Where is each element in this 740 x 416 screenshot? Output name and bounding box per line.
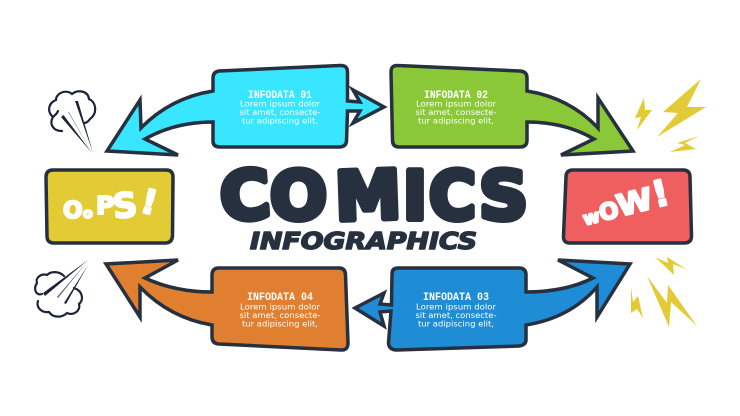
oops lettering: P: [96, 191, 114, 220]
body text: infodata 01: tur adipiscing elit,: [242, 116, 318, 126]
body text: infodata 01: [240, 100, 321, 126]
title: comics: [217, 155, 528, 237]
title: comics: M: [334, 156, 402, 236]
icon: smoke cloud bottom: [35, 260, 88, 317]
body text: infodata 01: sit amet, consecte-: [240, 108, 321, 117]
body text: infodata 04: tur adipiscing elit,: [242, 320, 318, 328]
panel: wow: [563, 170, 692, 243]
wow lettering: w: [581, 206, 602, 230]
oops lettering: [63, 181, 161, 227]
icon: lightning bolts bottom right: [631, 257, 697, 327]
speed lines top: [61, 101, 93, 153]
title: comics: C: [217, 155, 273, 237]
body text: infodata 02: [416, 100, 497, 126]
wow lettering: W: [613, 182, 657, 224]
title: comics: O: [270, 157, 327, 235]
oops lettering: S: [111, 185, 139, 227]
icon: smoke cloud top: [49, 91, 95, 153]
body text: infodata 03: [416, 302, 497, 328]
wow lettering: [577, 173, 674, 234]
speed lines bottom: [43, 260, 88, 304]
icon: lightning bolts top right: [635, 79, 706, 152]
body text: infodata 02: tur adipiscing elit,: [418, 116, 494, 126]
title: comics: S: [479, 157, 528, 235]
subtitle: infographics: INFOGRAPHICS: [250, 229, 477, 255]
body text: infodata 01: Lorem ipsum dolor: [240, 100, 321, 108]
body text: infodata 03: Lorem ipsum dolor: [416, 302, 497, 312]
wow lettering: !: [648, 173, 674, 216]
oops lettering: O: [63, 198, 83, 224]
body text: infodata 04: Lorem ipsum dolor: [240, 302, 321, 312]
oops lettering: o: [83, 206, 93, 222]
body text: infodata 03: sit amet, consecte-: [416, 311, 497, 320]
panel: infodata 04 with arrow: [106, 260, 348, 350]
panel: infodata 01 with double arrow: [107, 65, 384, 155]
panel: infodata 03 with double arrow: [355, 260, 630, 350]
body text: infodata 04: [240, 302, 321, 328]
heading: infodata 03: INFODATA 03: [423, 292, 489, 304]
body text: infodata 02: sit amet, consecte-: [416, 108, 497, 117]
title: comics: I: [403, 157, 427, 235]
title: comics: C: [429, 157, 476, 235]
heading: infodata 04: INFODATA 04: [247, 292, 313, 304]
body text: infodata 03: tur adipiscing elit,: [418, 320, 494, 328]
body text: infodata 04: sit amet, consecte-: [240, 311, 321, 320]
wow lettering: O: [596, 197, 622, 227]
heading: infodata 02: INFODATA 02: [424, 90, 488, 102]
panel: infodata 02 with arrow: [391, 65, 633, 155]
heading: infodata 01: INFODATA 01: [248, 90, 312, 102]
panel: oops: [46, 170, 173, 243]
oops lettering: !: [137, 181, 161, 224]
body text: infodata 02: Lorem ipsum dolor: [416, 100, 497, 108]
